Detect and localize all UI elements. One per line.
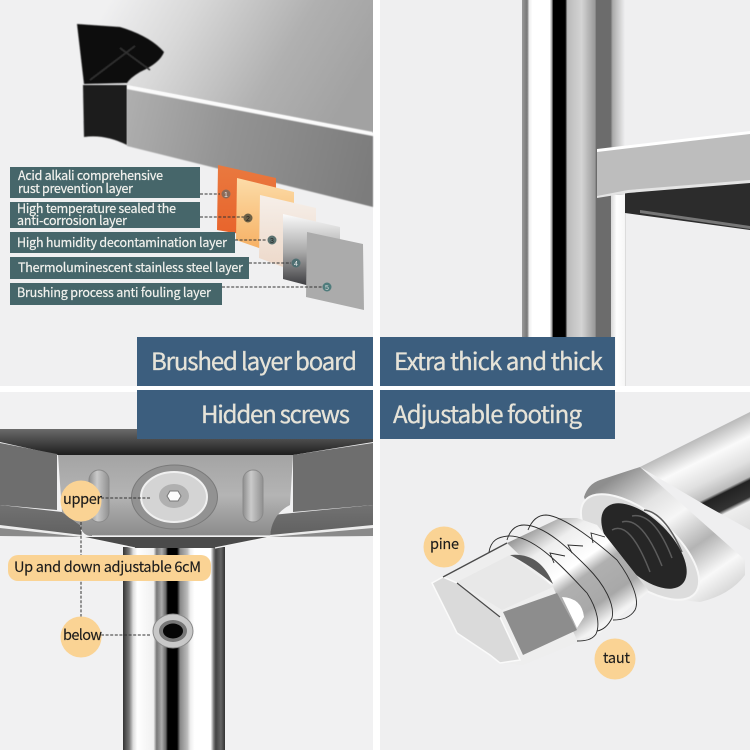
leg tube [123,547,225,750]
right rail [293,443,373,512]
layer 3 cream [259,195,316,275]
label: high temperature layer: anti-corrosion layer [17,210,127,229]
label: acid alkali layer [10,165,200,198]
vertical tube [522,0,625,386]
callout: adjustable 6cm: Up and down adjustable 6cM [14,556,201,577]
callout: upper [60,480,102,522]
callout: below [60,616,102,658]
banner: hidden screws [137,390,373,439]
layer 2 peach [236,178,294,255]
mounting plate [58,455,293,536]
plate slots [89,470,109,522]
table front edge [127,85,373,207]
callout: taut: taut [603,647,631,668]
banner: extra thick and thick: Extra thick and thick [394,342,603,377]
leader lines and number badges [200,190,332,292]
panel: extra thick tube [380,0,750,386]
diagram: exploded coating layers [217,165,364,310]
leaders upper and below [81,498,150,635]
shelf underside [625,178,750,230]
panel: hidden screws [0,392,373,750]
callout: taut [594,638,636,680]
leader lines and number badges: 4 [294,261,298,268]
layer 4 gradient [283,214,340,290]
banner: brushed layer board [137,337,373,386]
label: high temperature layer: High temperature sealed the [17,198,176,217]
foot edge shading [443,543,507,617]
leader lines and number badges: 1 [224,192,228,199]
callout: upper: upper [63,488,102,509]
callout: pine [424,526,464,568]
callout: below: below [63,624,102,645]
panel: adjustable footing [380,392,750,750]
label: thermoluminescent layer: Thermoluminescent stainless steel layer [18,257,243,276]
label: brushing process layer: Brushing process anti fouling layer [17,282,211,301]
leader lines and number badges: 3 [270,238,274,245]
callout: pine: pine [430,533,459,554]
thread [587,489,701,603]
table top surface [90,0,373,133]
foot top facet [457,555,553,610]
banner: extra thick and thick [380,337,615,386]
layer 1 orange [217,165,276,240]
label: acid alkali layer: Acid alkali comprehensive [18,165,163,184]
hidden screw [132,465,218,529]
label: high humidity layer: High humidity decontamination layer [17,232,227,251]
collar [584,467,745,602]
label: acid alkali layer: rust prevention layer [18,178,133,197]
foot neck [507,518,648,640]
banner: adjustable footing [380,390,615,439]
banner: brushed layer board: Brushed layer board [151,342,357,377]
rotation arrows [489,515,636,641]
collar opening [564,475,716,619]
banner: adjustable footing: Adjustable footing [393,395,582,430]
foot notch [510,555,553,584]
leader lines and number badges: 5 [325,285,329,292]
foot grey facet [503,593,577,655]
foot body [432,518,648,665]
left rail [0,443,57,510]
foot end face [432,577,520,663]
layer 5 grey [306,232,364,310]
table underside [0,429,373,455]
plate neck [82,537,270,548]
leader lines and number badges: 2 [246,216,250,223]
panel: brushed layer board [0,0,373,386]
banner: hidden screws: Hidden screws [201,395,350,430]
label: high temperature layer [10,198,200,229]
tube lower reflection [611,195,625,386]
tube [640,412,750,530]
black corner cut-out [77,24,164,145]
shelf front bar [597,132,750,197]
leg screw hole [153,614,193,648]
